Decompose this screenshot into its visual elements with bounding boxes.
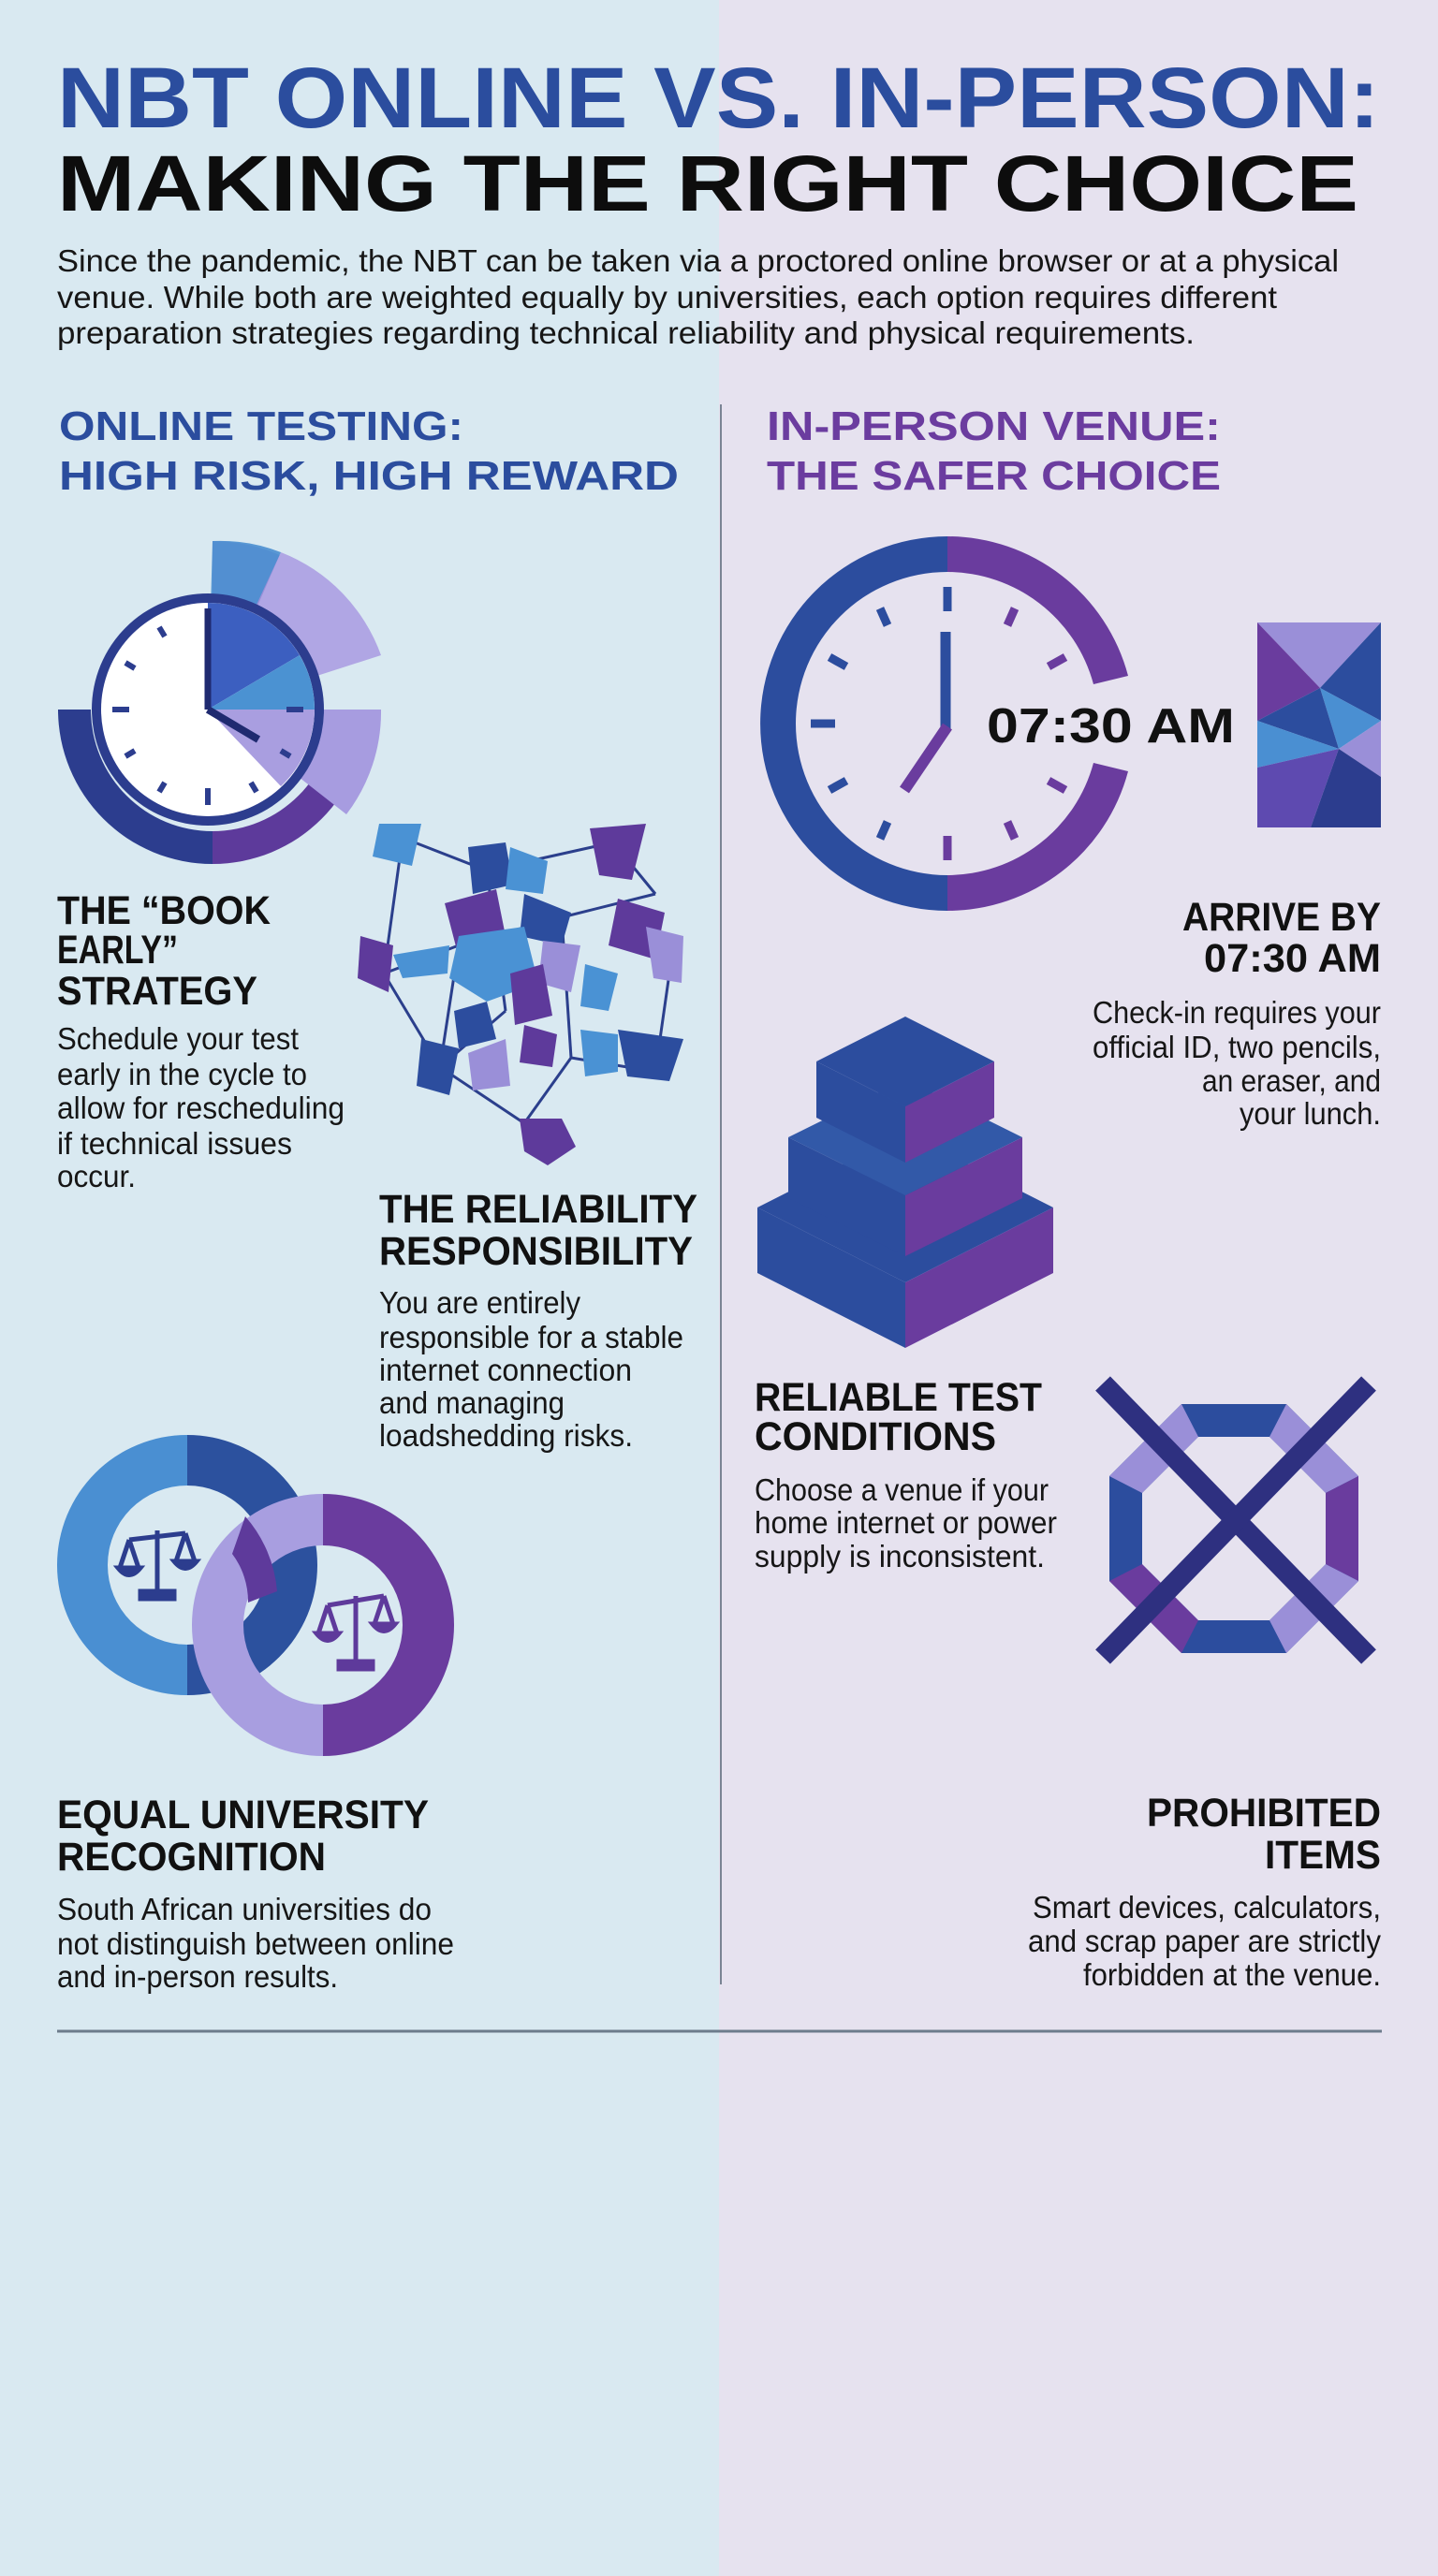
text block: reliable test conditions: home internet or power: [755, 1505, 1057, 1540]
text block: reliable test conditions: supply is inconsistent.: [755, 1539, 1045, 1573]
text block: equal university recognition: and in-person results.: [57, 1959, 338, 1994]
icon: prohibited items: [1103, 1383, 1369, 1657]
intro paragraph: venue. While both are weighted equally by universities, each option requires different: [57, 280, 1277, 315]
heading: in-person venue: IN-PERSON VENUE:: [767, 403, 1221, 449]
text block: arrive by: Check-in requires your: [1093, 995, 1381, 1030]
text block: book early strategy: STRATEGY: [57, 969, 257, 1014]
text block: reliability responsibility: You are entirely: [379, 1285, 580, 1320]
text block: book early strategy: Schedule your test: [57, 1021, 299, 1056]
text block: equal university recognition: [57, 1793, 454, 1994]
intro paragraph: preparation strategies regarding technical reliability and physical requirements.: [57, 315, 1195, 350]
text block: prohibited items: Smart devices, calculators,: [1033, 1890, 1381, 1925]
text block: arrive by: an eraser, and: [1202, 1063, 1381, 1098]
text block: book early strategy: [57, 888, 345, 1193]
text block: prohibited items: and scrap paper are strictly: [1028, 1924, 1381, 1958]
text block: book early strategy: EARLY”: [57, 928, 178, 973]
text block: arrive by: official ID, two pencils,: [1093, 1030, 1381, 1064]
icon: geometric block: [1257, 622, 1381, 827]
text block: book early strategy: THE “BOOK: [57, 888, 271, 933]
icon: network: [358, 824, 683, 1165]
text block: equal university recognition: South African universities do: [57, 1892, 432, 1926]
text block: reliability responsibility: RESPONSIBILITY: [379, 1229, 693, 1274]
text block: reliability responsibility: responsible for a stable: [379, 1320, 683, 1354]
heading: in-person venue: THE SAFER CHOICE: [767, 453, 1221, 499]
title: [57, 51, 1380, 227]
intro paragraph: Since the pandemic, the NBT can be taken via a proctored online browser or at a physical: [57, 243, 1339, 278]
icon: scale purple: [316, 1596, 395, 1669]
title: MAKING THE RIGHT CHOICE: [57, 139, 1358, 227]
text block: prohibited items: PROHIBITED: [1147, 1791, 1381, 1836]
icon: overlapping rings with scales: [57, 1435, 454, 1756]
text block: arrive by: 07:30 AM: [1204, 936, 1381, 981]
text block: arrive by: ARRIVE BY: [1182, 895, 1381, 940]
text block: reliability responsibility: loadshedding risks.: [379, 1418, 633, 1453]
intro paragraph: [57, 243, 1339, 350]
text block: arrive by: [1093, 895, 1381, 1131]
text block: reliability responsibility: internet connection: [379, 1353, 632, 1387]
text block: prohibited items: ITEMS: [1265, 1833, 1381, 1878]
clock time label: 07:30 AM: [987, 699, 1235, 754]
heading: online testing: ONLINE TESTING:: [59, 403, 463, 449]
text block: reliable test conditions: Choose a venue if your: [755, 1472, 1049, 1507]
icon: arrival clock: [760, 536, 1235, 911]
text block: reliability responsibility: and managing: [379, 1385, 565, 1420]
text block: equal university recognition: EQUAL UNIVERSITY: [57, 1793, 429, 1837]
text block: reliable test conditions: CONDITIONS: [755, 1414, 996, 1459]
text block: reliable test conditions: RELIABLE TEST: [755, 1375, 1042, 1420]
text block: book early strategy: occur.: [57, 1159, 136, 1193]
heading: online testing: HIGH RISK, HIGH REWARD: [59, 453, 679, 499]
text block: arrive by: your lunch.: [1240, 1096, 1381, 1131]
heading: in-person venue: [767, 403, 1221, 499]
text block: book early strategy: early in the cycle to: [57, 1057, 307, 1091]
heading: online testing: [59, 403, 679, 499]
text block: reliability responsibility: [379, 1187, 697, 1453]
icon: stacked pyramid: [757, 1017, 1053, 1348]
icon: book early clock: [58, 541, 381, 864]
text block: prohibited items: forbidden at the venue.: [1083, 1957, 1381, 1992]
text block: equal university recognition: not distinguish between online: [57, 1926, 454, 1961]
text block: reliable test conditions: [755, 1375, 1057, 1573]
text block: book early strategy: if technical issues: [57, 1126, 292, 1161]
text block: equal university recognition: RECOGNITION: [57, 1835, 326, 1880]
text block: reliability responsibility: THE RELIABILITY: [379, 1187, 697, 1232]
text block: book early strategy: allow for rescheduling: [57, 1090, 345, 1125]
title: NBT ONLINE VS. IN-PERSON:: [57, 51, 1380, 146]
text block: prohibited items: [1028, 1791, 1381, 1992]
icon: scale blue: [118, 1530, 197, 1599]
